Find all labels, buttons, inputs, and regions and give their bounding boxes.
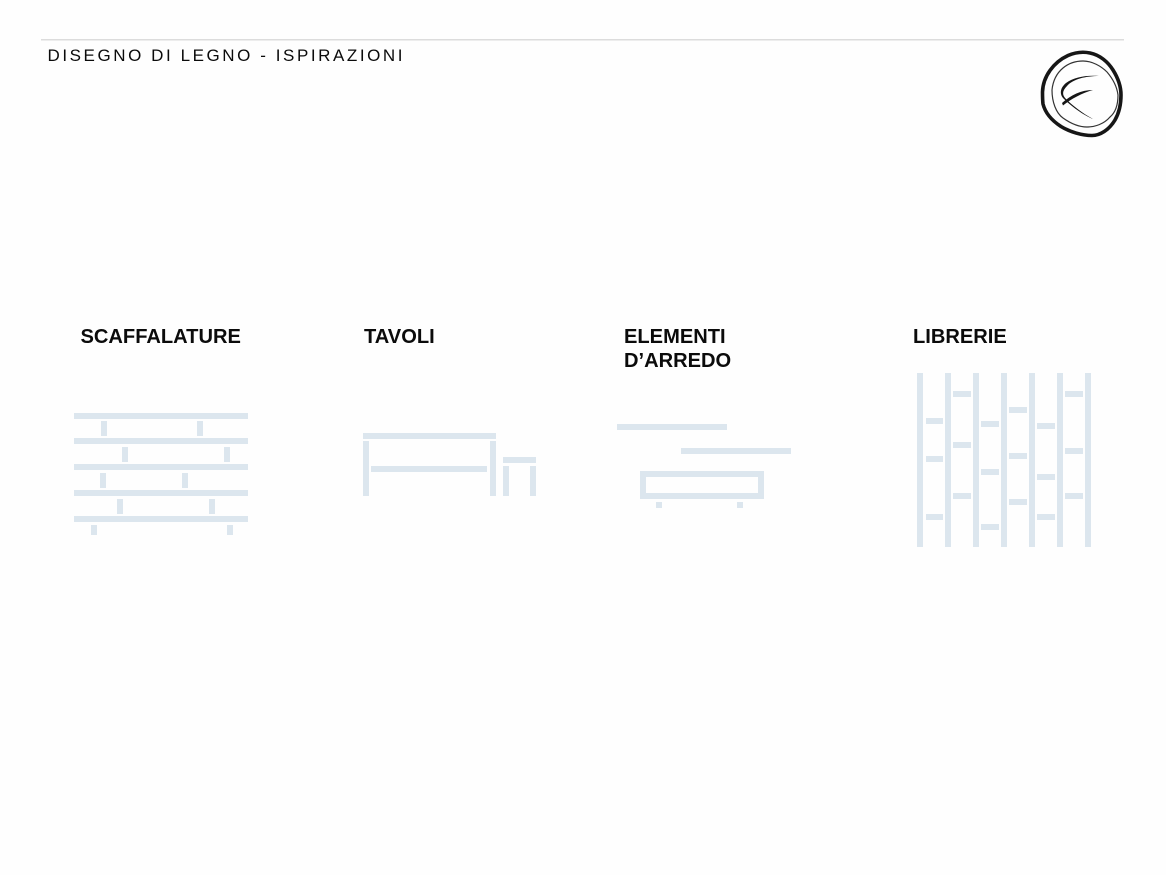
heading: scaffalature: SCAFFALATURE xyxy=(80,326,241,348)
heading: tavoli: TAVOLI xyxy=(364,326,435,348)
icon: logo xyxy=(1042,52,1121,136)
icon: elementi d'arredo xyxy=(617,424,791,508)
title: DISEGNO DI LEGNO - ISPIRAZIONI xyxy=(48,46,402,65)
icon: tavoli table and stool xyxy=(363,433,536,496)
icon: librerie bookcase xyxy=(917,373,1091,547)
icon: scaffalature shelves xyxy=(74,413,248,535)
heading: elementi d'arredo: D’ARREDO xyxy=(624,350,731,372)
heading: librerie: LIBRERIE xyxy=(913,326,1007,348)
heading: elementi d'arredo: ELEMENTI xyxy=(624,326,726,348)
